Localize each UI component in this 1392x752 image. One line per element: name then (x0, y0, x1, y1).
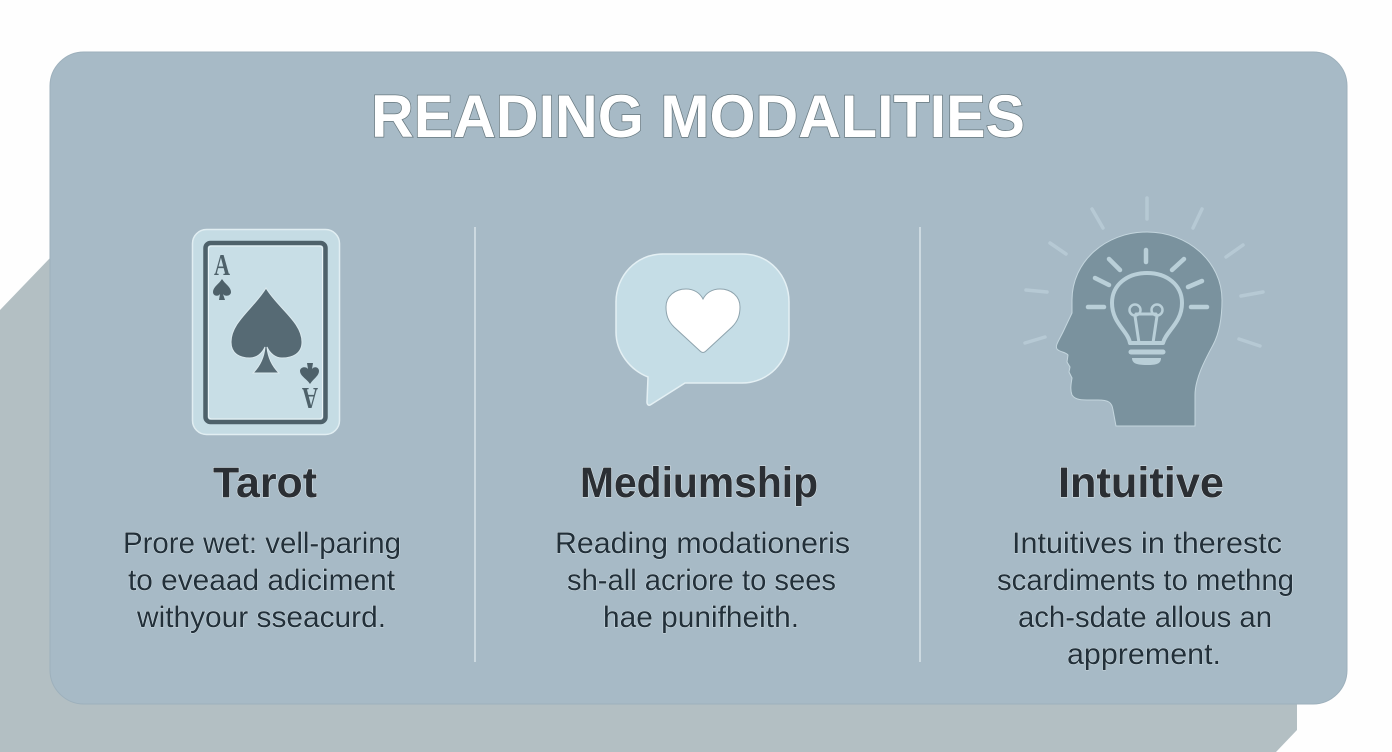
text block: tarot description: to eveaad adiciment (128, 564, 396, 597)
icon: head with lightbulb (1025, 198, 1263, 426)
light bulb (1112, 273, 1182, 352)
head silhouette (1056, 232, 1222, 426)
text block: mediumship description: hae punifheith. (603, 601, 799, 634)
text block: tarot description: Prore wet: vell-paring (123, 527, 401, 560)
text block: intuitive description: ach-sdate allous an (1018, 601, 1272, 634)
icon: ace of spades card: A (214, 247, 230, 282)
text block: mediumship description: sh-all acriore to sees (567, 564, 836, 597)
panel: mediumship (555, 254, 850, 634)
outer rays (1025, 198, 1263, 346)
title: READING MODALITIES (371, 83, 1025, 150)
icon: ace of spades card (192, 230, 340, 434)
panel: tarot (123, 230, 401, 634)
background shadow shape (0, 258, 1297, 752)
heading: Mediumship: Mediumship (580, 459, 818, 507)
text block: mediumship description (555, 527, 850, 634)
icon: ace of spades card: A (302, 381, 318, 416)
heading: Tarot: Tarot (213, 459, 317, 507)
text block: tarot description: withyour sseacurd. (136, 601, 386, 634)
text block: intuitive description: apprement. (1067, 638, 1221, 671)
panel: intuitive (997, 198, 1294, 671)
text block: mediumship description: Reading modationeris (555, 527, 850, 560)
text block: tarot description (123, 527, 401, 634)
text block: intuitive description: scardiments to methng (997, 564, 1294, 597)
text block: intuitive description (997, 527, 1294, 671)
inner rays (1088, 250, 1207, 307)
icon: speech bubble with heart (616, 254, 789, 405)
text block: intuitive description: Intuitives in therestc (1012, 527, 1282, 560)
heading: Intuitive: Intuitive (1058, 459, 1224, 507)
column dividers (475, 227, 920, 662)
